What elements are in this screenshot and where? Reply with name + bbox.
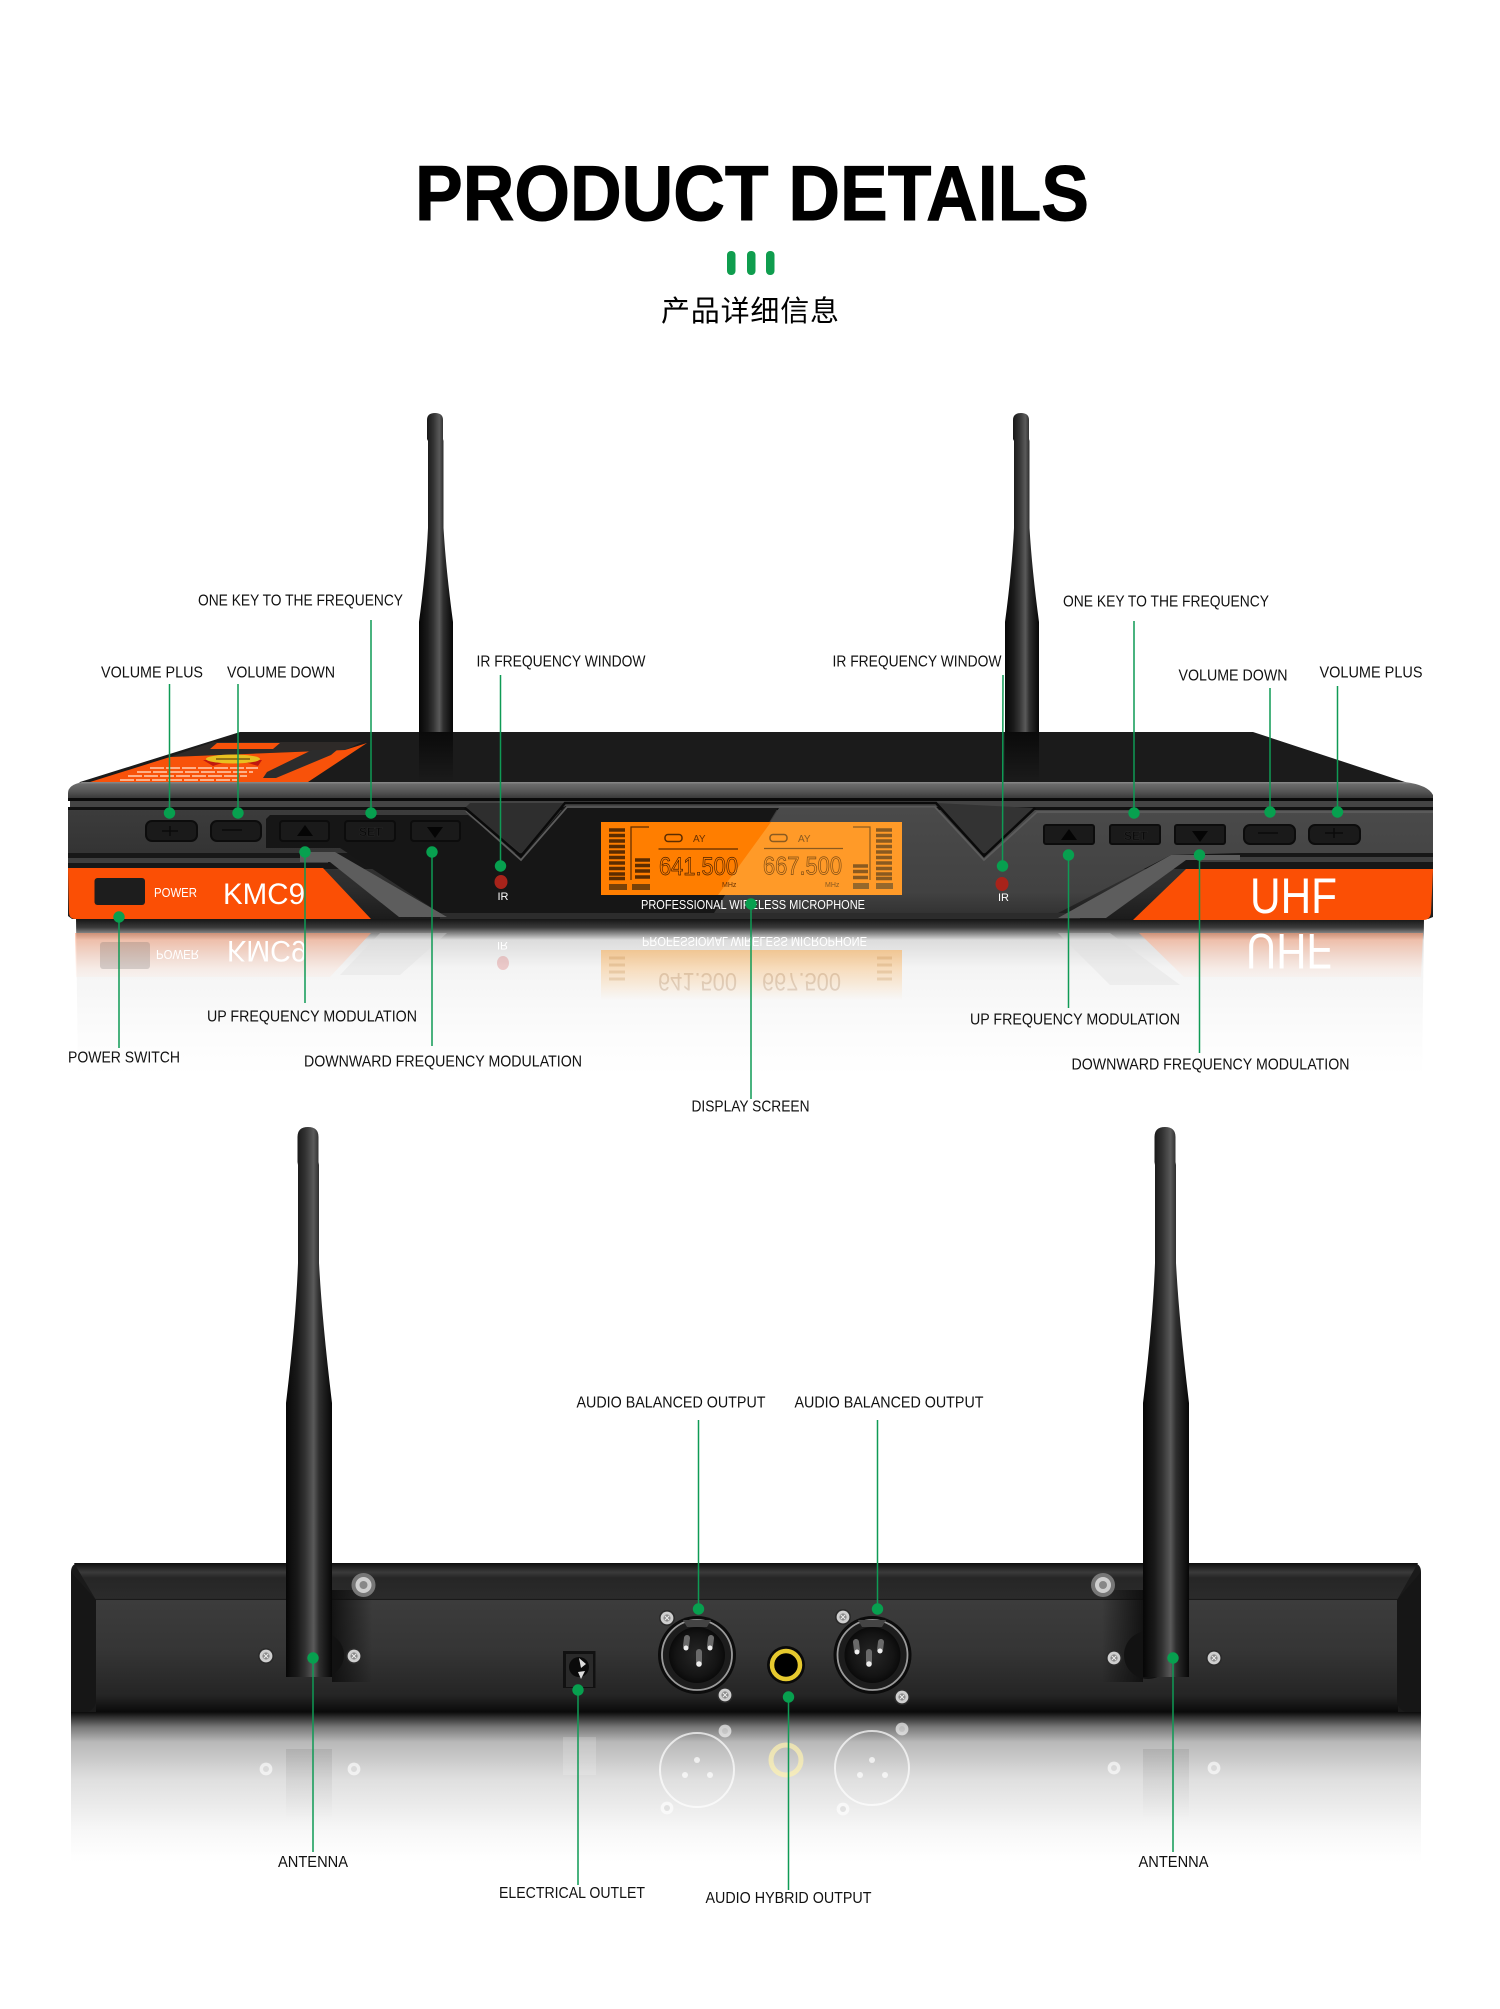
top surface of receiver bbox=[68, 732, 1433, 800]
sticker dark strip bbox=[170, 742, 362, 757]
front reflection: UHF bbox=[1246, 923, 1332, 979]
callout: audio balanced output left: AUDIO BALANCED OUTPUT bbox=[576, 1394, 766, 1412]
icon: three green bars bbox=[727, 251, 774, 275]
right battery icon bbox=[770, 834, 787, 842]
sticker small print bbox=[120, 768, 258, 780]
panel: rear view of receiver bbox=[71, 1127, 1421, 1862]
left antenna connector bbox=[300, 1633, 344, 1677]
callout: power switch bbox=[68, 911, 180, 1066]
callout: IR window right bbox=[832, 654, 1008, 872]
callout: volume plus left: VOLUME PLUS bbox=[101, 664, 203, 682]
callout: antenna right: ANTENNA bbox=[1138, 1854, 1209, 1871]
right frequency: 667.500 bbox=[763, 852, 842, 880]
callout: electrical outlet bbox=[499, 1684, 645, 1902]
callout: volume down left bbox=[227, 664, 335, 819]
front reflection: PROFESSIONAL WIRELESS MICROPHONE bbox=[642, 934, 867, 948]
callout: volume down right bbox=[1178, 668, 1288, 818]
left IR indicator bbox=[494, 875, 509, 903]
panel: front view of receiver bbox=[68, 413, 1433, 1075]
front reflection: POWER bbox=[156, 947, 199, 961]
right bracket bbox=[853, 827, 870, 880]
callout: volume plus right bbox=[1320, 664, 1422, 818]
front reflection: 667.500 bbox=[762, 967, 841, 995]
callouts: front view bbox=[68, 592, 1422, 1116]
left frequency: 641.500 bbox=[659, 853, 738, 881]
bottom strip of face bbox=[440, 913, 1080, 919]
XLR connector right bbox=[834, 1616, 912, 1694]
callout: one key left bbox=[198, 592, 403, 819]
right MHz: MHz bbox=[825, 882, 840, 889]
left meter tags bbox=[609, 884, 650, 890]
sticker orange bbox=[90, 743, 367, 782]
callout: volume down left: VOLUME DOWN bbox=[227, 664, 335, 682]
left notch wedge bbox=[465, 803, 565, 853]
large screw left bbox=[352, 1573, 376, 1597]
left buttons bbox=[146, 821, 460, 841]
left divider bbox=[658, 848, 738, 850]
callout: up frequency left bbox=[207, 846, 417, 1026]
LCD display bbox=[601, 822, 902, 895]
callout: IR window left bbox=[476, 654, 646, 872]
callout: audio hybrid output: AUDIO HYBRID OUTPUT bbox=[706, 1890, 872, 1907]
bezel highlight bbox=[466, 807, 1433, 860]
left level meters bbox=[609, 830, 650, 878]
callout: display screen bbox=[692, 898, 810, 1116]
callout: up frequency right bbox=[970, 849, 1180, 1028]
connector shadow left bbox=[332, 1590, 372, 1682]
front face bbox=[68, 808, 1433, 919]
callout: up frequency left: UP FREQUENCY MODULATION bbox=[207, 1008, 417, 1026]
power label: POWER bbox=[154, 886, 197, 900]
professional wireless microphone caption: PROFESSIONAL WIRELESS MICROPHONE bbox=[641, 898, 865, 912]
callout: downward frequency left bbox=[304, 846, 582, 1070]
rear chassis bbox=[71, 1563, 1421, 1712]
subtitle: 产品详细信息 bbox=[661, 295, 839, 328]
callout: one key left: ONE KEY TO THE FREQUENCY bbox=[198, 592, 403, 610]
front reflection: 641.500 bbox=[658, 967, 737, 995]
callout: IR window right: IR FREQUENCY WINDOW bbox=[832, 654, 1002, 670]
sticker medal bbox=[203, 754, 262, 766]
rear right antenna bbox=[1143, 1127, 1189, 1677]
sticker tag bbox=[210, 743, 280, 749]
rear left antenna bbox=[286, 1127, 332, 1677]
callout: downward frequency left: DOWNWARD FREQUENCY MODULATION bbox=[304, 1054, 582, 1070]
title: PRODUCT DETAILS bbox=[415, 149, 1089, 237]
left bracket bbox=[631, 827, 649, 880]
left gray chevron bbox=[300, 852, 447, 917]
callout: antenna left: ANTENNA bbox=[278, 1854, 348, 1871]
front reflection: IR bbox=[497, 939, 508, 951]
central and left black panel bbox=[266, 806, 779, 913]
callout: volume plus right: VOLUME PLUS bbox=[1320, 664, 1422, 682]
callout: audio balanced output right bbox=[794, 1394, 984, 1615]
right divider bbox=[764, 848, 843, 850]
right buttons: SET bbox=[1124, 829, 1148, 843]
front reflection bbox=[75, 918, 1424, 1075]
left buttons: SET bbox=[359, 825, 383, 839]
sticker microphone bbox=[263, 750, 337, 778]
callout: audio balanced output right: AUDIO BALANCED OUTPUT bbox=[794, 1394, 984, 1412]
left battery icon bbox=[665, 834, 682, 842]
right IR indicator: IR bbox=[998, 892, 1009, 904]
power switch bbox=[94, 878, 145, 905]
callout: antenna left bbox=[278, 1652, 348, 1871]
rear reflection bbox=[71, 1712, 1421, 1862]
bezel shadow line bbox=[465, 803, 1035, 856]
right gray chevron bbox=[1058, 855, 1240, 918]
callout: audio hybrid output bbox=[706, 1691, 872, 1907]
front reflection: KMC9 bbox=[227, 934, 307, 967]
left MHz: MHz bbox=[722, 882, 737, 889]
callout: volume plus left bbox=[101, 664, 203, 819]
callout: display screen: DISPLAY SCREEN bbox=[692, 1098, 810, 1116]
lower dark strip bbox=[68, 853, 1433, 869]
electrical outlet bbox=[563, 1651, 596, 1688]
right antenna connector bbox=[1124, 1631, 1172, 1679]
callouts: rear view bbox=[278, 1394, 1209, 1907]
right meter tags bbox=[853, 883, 893, 889]
callout: audio balanced output left bbox=[576, 1394, 766, 1615]
right level meters bbox=[853, 830, 892, 878]
callout: downward frequency right bbox=[1072, 849, 1350, 1074]
callout: up frequency right: UP FREQUENCY MODULATION bbox=[970, 1012, 1180, 1028]
XLR connector left bbox=[658, 1616, 736, 1694]
callout: one key right: ONE KEY TO THE FREQUENCY bbox=[1063, 594, 1269, 610]
right front antenna bbox=[1005, 413, 1039, 735]
right buttons bbox=[1044, 825, 1360, 844]
hybrid audio jack bbox=[767, 1646, 805, 1684]
right IR indicator bbox=[996, 877, 1009, 904]
callout: volume down right: VOLUME DOWN bbox=[1178, 668, 1288, 684]
mounting screws bbox=[258, 1609, 1222, 1705]
model KMC9: KMC9 bbox=[223, 878, 305, 911]
callout: antenna right bbox=[1138, 1652, 1209, 1871]
left IR indicator: IR bbox=[498, 891, 509, 903]
right AY label: AY bbox=[798, 834, 811, 845]
right button face and sheen bbox=[714, 808, 1433, 913]
UHF text: UHF bbox=[1250, 868, 1337, 924]
callout: electrical outlet: ELECTRICAL OUTLET bbox=[499, 1885, 645, 1902]
top rim bbox=[68, 782, 1433, 798]
callout: power switch: POWER SWITCH bbox=[68, 1050, 180, 1066]
left orange band bbox=[68, 868, 371, 919]
large screw right bbox=[1091, 1573, 1115, 1597]
left front antenna bbox=[419, 413, 453, 735]
callout: downward frequency right: DOWNWARD FREQUENCY MODULATION bbox=[1072, 1056, 1350, 1074]
right notch wedge bbox=[936, 803, 1035, 853]
left AY label: AY bbox=[693, 834, 706, 845]
right orange band bbox=[1133, 869, 1433, 920]
callout: IR window left: IR FREQUENCY WINDOW bbox=[476, 654, 646, 670]
callout: one key right bbox=[1063, 594, 1269, 819]
connector shadow right bbox=[1102, 1590, 1143, 1682]
